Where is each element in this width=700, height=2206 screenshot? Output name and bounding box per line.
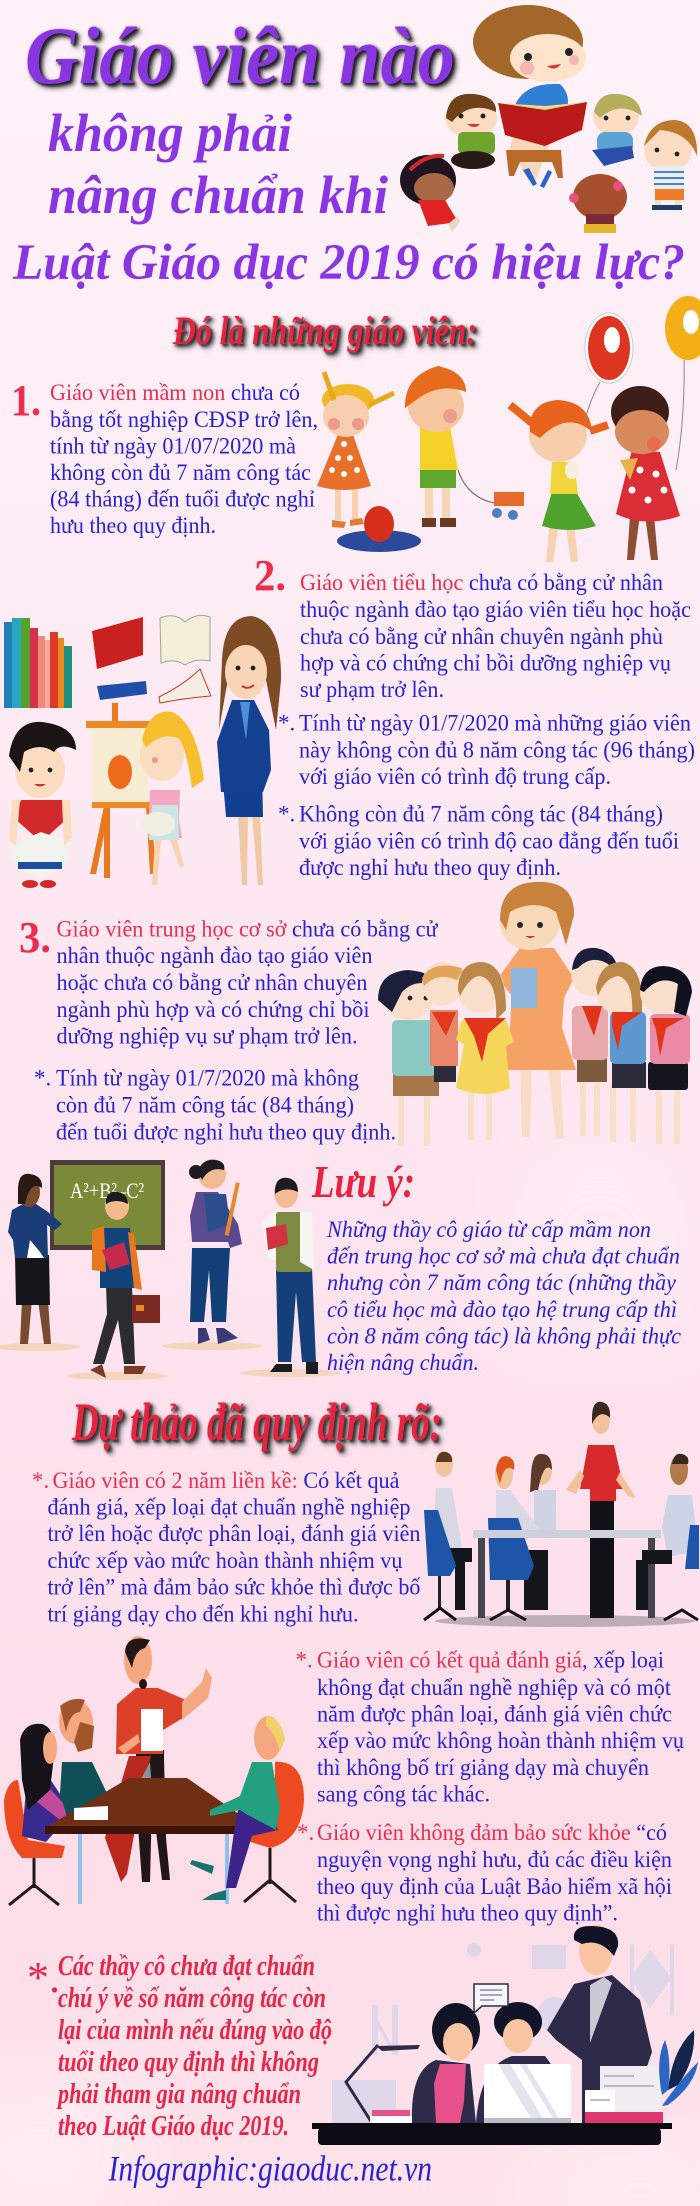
section 3 text (34, 916, 439, 1144)
note heading: Lưu ý: (311, 1156, 415, 1207)
teacher (473, 5, 587, 188)
pupil in pink (571, 948, 618, 1136)
note text (326, 1217, 681, 1375)
speech bubble (474, 1984, 508, 2013)
section 3 text: Tính từ ngày 01/7/2020 mà không (56, 1066, 359, 1090)
draft rule 3 text: nguyện vọng nghỉ hưu, đủ các điều kiện (317, 1847, 672, 1872)
heading: Dự thảo đã quy định rõ: Dự thảo đã quy định rõ: (71, 1392, 442, 1452)
white and red book (159, 669, 211, 703)
standing man in suit (547, 1925, 652, 2123)
pale background structures (332, 1943, 674, 2124)
pupil in pink, black hair (640, 966, 692, 1144)
seated man right (636, 1454, 699, 1620)
seated woman (412, 2003, 480, 2123)
woman in navy (8, 1174, 62, 1344)
closing note text (56, 1950, 332, 2142)
desk lamp (346, 2045, 420, 2123)
teacher in orange (498, 882, 576, 1139)
boy in green (445, 94, 497, 169)
draft rule 2 text: xếp vào mức không hoàn thành nhiệm vụ (317, 1728, 684, 1753)
draft rule 1 text: trở lên hoặc được phân loại, đánh giá viên (48, 1521, 421, 1546)
section 1 text: hưu theo quy định. (50, 513, 216, 538)
open cream book (160, 615, 210, 665)
illustration: teacher reading to children (400, 5, 697, 233)
title line 1: Giáo viên nào (25, 10, 455, 101)
ground shadows (0, 1342, 340, 1380)
title line 4: Luật Giáo dục 2019 có hiệu lực? (12, 235, 685, 291)
standing presenter (566, 1402, 636, 1618)
pupil in blue (596, 962, 646, 1142)
closing note text: tuổi theo quy định thì không (58, 2046, 319, 2078)
note text: nhưng còn 7 năm công tác (những thầy (327, 1270, 677, 1295)
section 3 text: ngành phù hợp và có chứng chỉ bồi (56, 997, 370, 1022)
draft rule 2 text: không đạt chuẩn nghề nghiệp và có một (317, 1675, 672, 1700)
section 1 text: tính từ ngày 01/07/2020 mà (50, 434, 296, 458)
standing man in red (105, 1636, 212, 1882)
section 2 text: thuộc ngành đào tạo giáo viên tiểu học hoặc (300, 597, 691, 622)
girl painting (140, 712, 204, 885)
section 2 number: 2. (254, 551, 286, 600)
illustration: books, children and teacher (4, 615, 281, 888)
section 2 text: với giáo viên có trình độ trung cấp. (299, 764, 611, 789)
draft rule 3 text (297, 1820, 672, 1926)
section 2 text: Không còn đủ 7 năm công tác (84 tháng) (299, 802, 663, 826)
draft rule 1 text: *. (32, 1468, 49, 1493)
laptop (484, 2064, 571, 2123)
draft rule 1 text: trí giảng dạy cho đến khi nghỉ hưu. (48, 1602, 358, 1626)
desk (312, 2123, 672, 2145)
section 2 text: được nghỉ hưu theo quy định. (299, 855, 561, 880)
illustration: four teachers at blackboard (0, 1159, 340, 1380)
section 3 text: hoặc chưa có bằng cử nhân chuyên (56, 970, 368, 995)
bearded man (59, 1699, 116, 1820)
section 2 text: sư phạm trở lên. (300, 677, 444, 702)
seated man left (434, 1451, 472, 1610)
illustration: office team at desk (312, 1925, 698, 2145)
illustration: children with balloons (317, 296, 700, 562)
red book (92, 617, 143, 669)
laptop (122, 1762, 152, 1801)
section 3 text: dưỡng nghiệp vụ sư phạm trở lên. (56, 1024, 358, 1048)
section 1 text: không còn đủ 7 năm công tác (50, 460, 311, 485)
pupil in salmon (422, 962, 462, 1082)
orange chair right (244, 1762, 304, 1902)
easel with painting (86, 703, 156, 878)
note text: cô tiểu học mà đào tạo hệ trung cấp thì (327, 1297, 677, 1322)
blackboard (50, 1160, 165, 1250)
closing note text: Các thầy cô chưa đạt chuẩn (58, 1950, 315, 1982)
draft rule 1 text (32, 1468, 421, 1626)
brown table (45, 1778, 261, 1904)
seated man (476, 2002, 570, 2123)
blackboard formula: A²+B²–C² (70, 1178, 144, 1203)
pupil in yellow (456, 962, 514, 1140)
section 1 number: 1. (11, 376, 41, 425)
pupil in teal (378, 970, 439, 1146)
closing note asterisk: *. (27, 1953, 60, 2002)
blue chair middle (488, 1518, 534, 1620)
blond man in green (190, 1716, 285, 1900)
draft rule 1 text: chức xếp vào mức hoàn thành nhiệm vụ (48, 1548, 403, 1573)
section 2 text: hợp và có chứng chỉ bồi dưỡng nghiệp vụ (300, 650, 671, 676)
section 3 text: Giáo viên trung học cơ sở chưa có bằng cử (56, 916, 439, 942)
section 1 text: (84 tháng) đến tuổi được nghỉ (50, 486, 315, 512)
draft rule 2 text: năm được phân loại, đánh giá viên chức (317, 1702, 672, 1726)
note text: đến trung học cơ sở mà chưa đạt chuẩn (327, 1244, 680, 1268)
section 1 text (50, 380, 318, 538)
draft rule 2 text (296, 1648, 684, 1806)
source credit: Infographic:giaoduc.net.vn (108, 2148, 432, 2188)
balloons (585, 296, 700, 470)
blue book (97, 681, 147, 700)
draft rule 1 text: đánh giá, xếp loại đạt chuẩn nghề nghiệp (48, 1494, 410, 1520)
section 3 text: *. (34, 1066, 51, 1090)
red ball (337, 506, 421, 552)
draft rule 1 text: trở lên” mà đảm bảo sức khỏe thì được bố (48, 1574, 421, 1600)
woman in plaid (189, 1159, 242, 1344)
meeting table (473, 1530, 661, 1618)
section 2 text: chưa có bằng cử nhân chuyên ngành phù (300, 624, 663, 649)
section 3 text: đến tuổi được nghỉ hưu theo quy định. (56, 1120, 396, 1144)
draft rule 1 text: Giáo viên có 2 năm liền kề: Có kết quả (52, 1468, 400, 1493)
illustration: team around a brown table (4, 1636, 304, 1905)
man with vest (262, 1178, 318, 1374)
closing note text: theo Luật Giáo dục 2019. (58, 2110, 289, 2142)
orange chair left (4, 1780, 65, 1905)
boy with book (9, 722, 76, 888)
draft rule 3 text: theo quy định của Luật Bảo hiểm xã hội (317, 1874, 672, 1899)
draft rule 3 text: Giáo viên không đảm bảo sức khỏe “có (317, 1820, 667, 1845)
paper stacks (585, 2066, 663, 2123)
student with backpack (90, 1192, 160, 1378)
section 2 text: với giáo viên có trình độ cao đẳng đến tuổi (299, 828, 679, 854)
closing note text: chú ý về số năm công tác còn (58, 1982, 326, 2014)
boy in stripes (644, 120, 697, 210)
books on desk (370, 2110, 412, 2123)
section 3 text: nhân thuộc ngành đào tạo giáo viên (56, 943, 373, 968)
title line 2: không phải (48, 103, 292, 163)
girl from behind (569, 174, 627, 233)
boy in blue (592, 94, 642, 166)
section 3 number: 3. (19, 913, 51, 962)
section 2 text: Tính từ ngày 01/7/2020 mà những giáo viên (299, 710, 691, 736)
note text: còn 8 năm công tác) là không phải thực (327, 1324, 681, 1348)
section 1 text: Giáo viên mầm non chưa có (50, 380, 300, 405)
draft rule 2 text: sang công tác khác. (317, 1782, 490, 1806)
girl in red (400, 155, 460, 232)
note text: Những thầy cô giáo từ cấp mầm non (326, 1217, 651, 1242)
floor shadow (435, 1615, 695, 1627)
plant (659, 2030, 698, 2106)
blue chair left (424, 1510, 456, 1620)
draft rule 3 text: thì được nghỉ hưu theo quy định”. (317, 1900, 618, 1926)
section 2 text: *. (278, 802, 295, 826)
title (12, 10, 685, 291)
draft rule 3 text: *. (297, 1820, 314, 1845)
seated woman and orange-haired man (495, 1454, 556, 1610)
woman in purple (20, 1724, 86, 1842)
section 2 text: này không còn đủ 8 năm công tác (96 tháng) (299, 738, 695, 762)
draft rule 2 text: *. (296, 1648, 313, 1672)
book stack (4, 618, 72, 708)
crying girl (317, 372, 394, 528)
closing note text: phải tham gia nâng chuẩn (56, 2078, 301, 2110)
section 3 text: còn đủ 7 năm công tác (84 tháng) (56, 1092, 354, 1118)
draft rule 2 text: Giáo viên có kết quả đánh giá, xếp loại (317, 1648, 664, 1672)
draft rule 2 text: thì không bố trí giảng dạy mà chuyển (317, 1755, 649, 1780)
section 2 text: Giáo viên tiểu học chưa có bằng cử nhân (300, 570, 663, 595)
note text: hiện nâng chuẩn. (327, 1350, 479, 1375)
closing note text: lại của mình nếu đúng vào độ (58, 2014, 332, 2046)
section 2 text: *. (278, 710, 295, 736)
heading: Đó là những giáo viên: Đó là những giáo viên: (172, 308, 477, 353)
section 1 text: bằng tốt nghiệp CĐSP trở lên, (50, 407, 318, 432)
section 2 text (278, 570, 695, 880)
teacher in blue suit (217, 616, 281, 885)
title line 3: nâng chuẩn khi (48, 165, 388, 225)
boy with toy (405, 366, 524, 527)
illustration: office meeting (424, 1402, 699, 1627)
girl with cone (611, 386, 680, 560)
illustration: teacher with pupils (378, 882, 692, 1146)
girl with ice cream (510, 400, 608, 562)
